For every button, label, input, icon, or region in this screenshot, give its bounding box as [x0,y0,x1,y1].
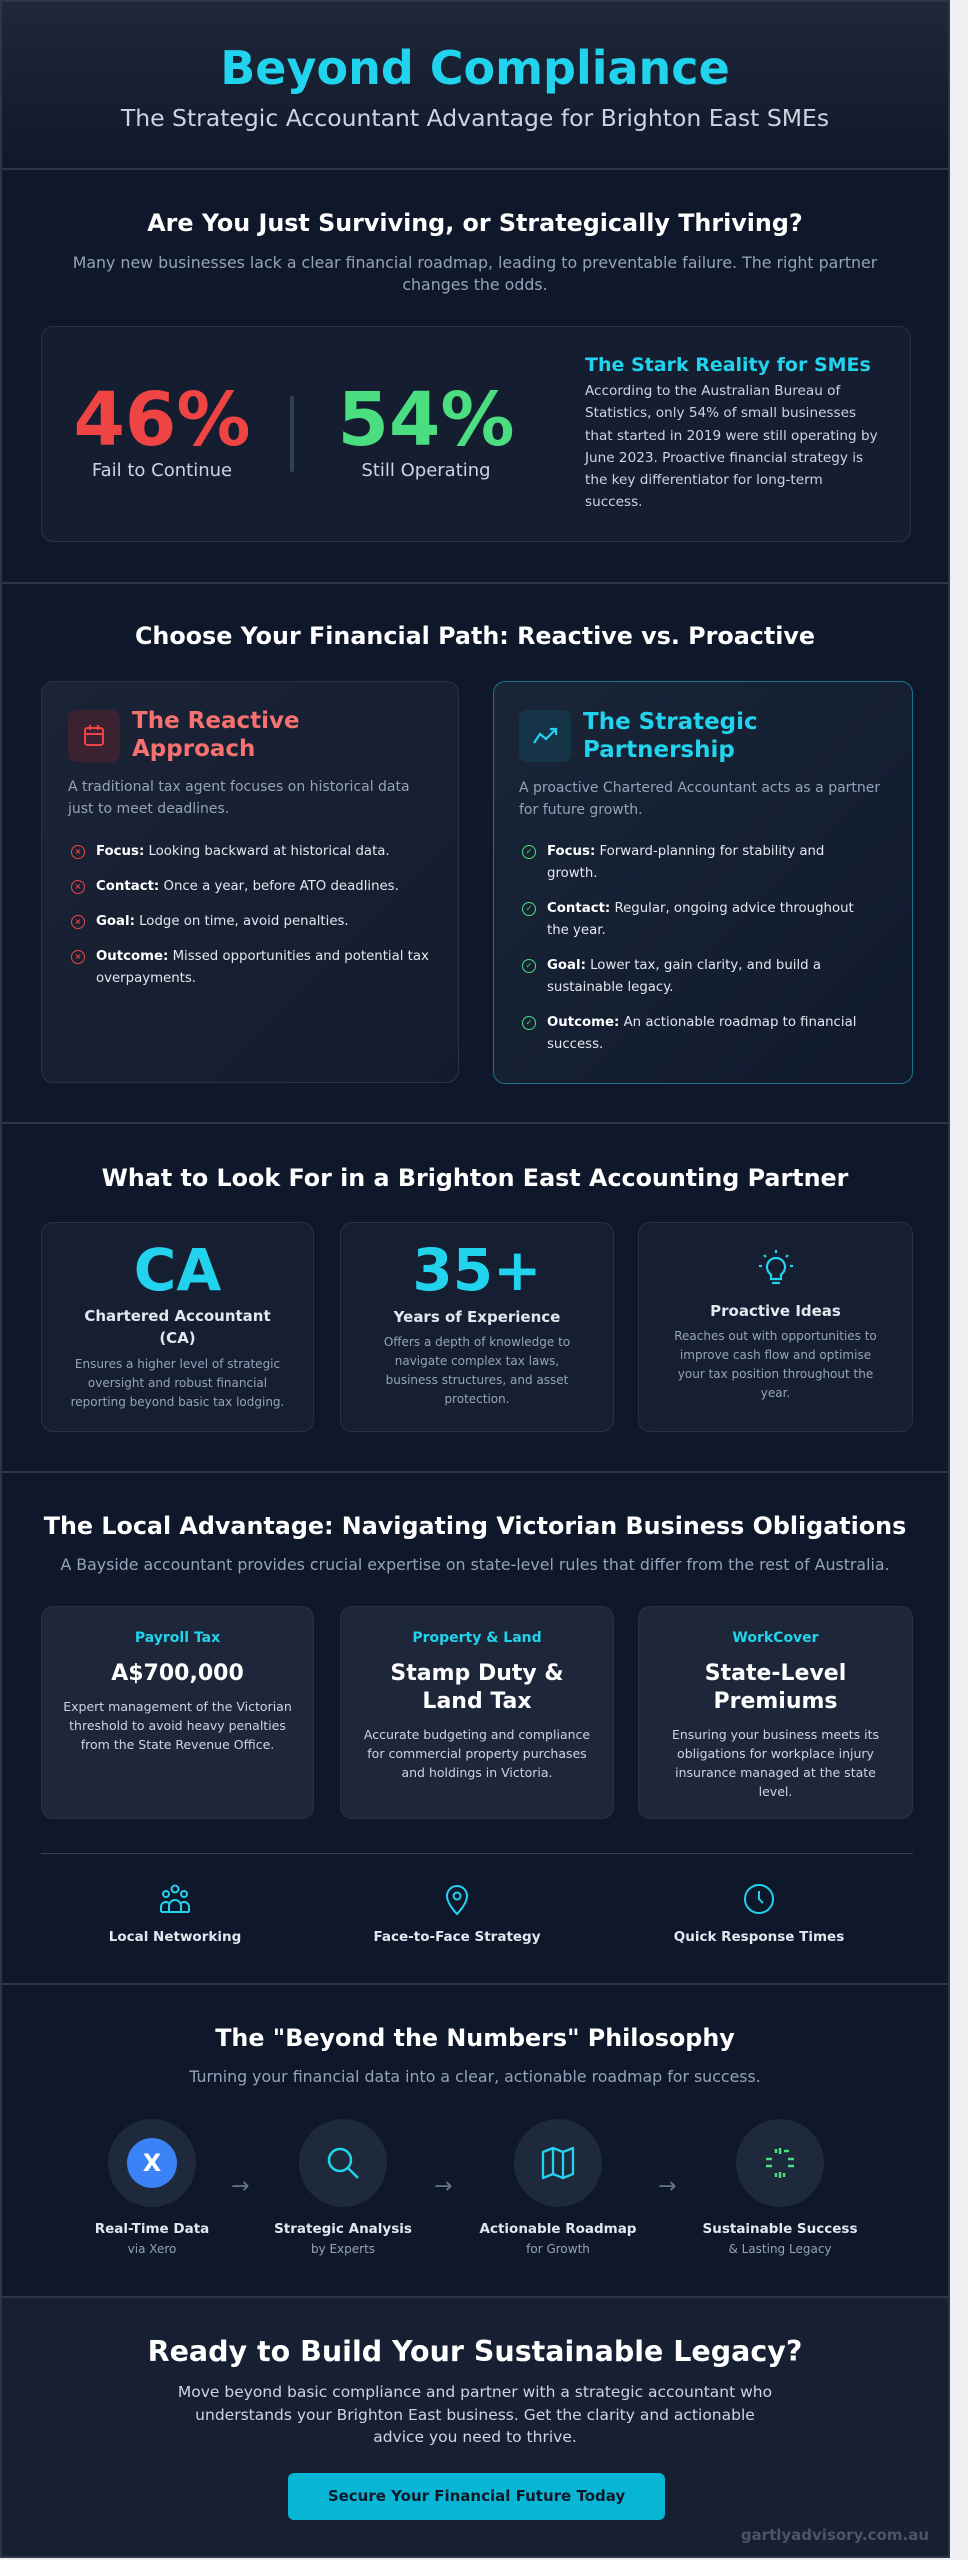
feature: networking: Local Networking [109,1929,241,1945]
text: Move beyond basic compliance and partner with a strategic accountant who understands your Brighton East business. Get the clarity and actionable advice you need to thrive. [178,2383,772,2446]
card: workcover [638,1606,913,1819]
list: Focus: Forward-planning for stability and growth. [547,844,824,881]
card: 35+ years [340,1222,614,1432]
stark reality text: The Stark Reality for SMEs [585,354,871,376]
title: The Strategic [583,709,758,735]
button [288,2473,665,2520]
list: Goal: Lower tax, gain clarity, and build a sustainable legacy. [547,958,821,995]
process flow [95,2119,858,2256]
list: ✓ [526,961,532,970]
stat: 46%: 46% [73,377,251,463]
list: ✓ [526,1018,532,1027]
description: A proactive Chartered Accountant acts as a partner for future growth. [519,780,880,818]
card: workcover: State-Level [705,1661,846,1686]
heading: The Local Advantage: Navigating Victorian Business Obligations [44,1512,906,1540]
feature: response times: Quick Response Times [674,1929,844,1945]
card: payroll tax: Expert management of the Victorian threshold to avoid heavy penalties from the State Revenue Office. [63,1699,292,1752]
feature: face-to-face: Face-to-Face Strategy [373,1929,541,1945]
stat card [41,326,911,542]
footer url: gartlyadvisory.com.au [741,2526,929,2544]
card: CA: (CA) [159,1329,196,1347]
panel: reactive [41,681,459,1083]
subtitle: The Strategic Accountant Advantage for Brighton East SMEs [121,104,829,132]
list [71,844,429,986]
stat: 46%: Fail to Continue [92,460,232,481]
card: proactive ideas [638,1222,913,1432]
heading: Are You Just Surviving, or Strategically Thriving? [147,209,803,237]
card: CA: CA [134,1236,221,1304]
subheading: A Bayside accountant provides crucial expertise on state-level rules that differ from the rest of Australia. [60,1555,890,1574]
icon: calendar [68,710,120,762]
step: real-time data: via Xero [128,2242,176,2256]
list: Outcome: An actionable roadmap to financial success. [547,1015,856,1052]
list: × [75,847,81,856]
feature: response times [674,1884,844,1945]
list: × [75,882,81,891]
card: CA: Ensures a higher level of strategic oversight and robust financial reporting beyond basic tax lodging. [71,1357,284,1409]
button: Secure Your Financial Future Today [328,2487,625,2505]
list: ✓ [526,904,532,913]
step: real-time data: X [143,2149,161,2177]
card: workcover: WorkCover [732,1630,819,1646]
card: proactive ideas: Reaches out with opportunities to improve cash flow and optimise your tax position throughout the year. [674,1329,877,1400]
subheading: Turning your financial data into a clear, actionable roadmap for success. [189,2067,761,2086]
title [132,708,300,762]
section: what to look for [41,1164,913,1432]
title: Beyond Compliance [220,41,730,95]
card: workcover: Premiums [713,1689,838,1714]
section: financial path [41,622,913,1084]
section: local advantage [41,1512,913,1945]
list: Focus: Looking backward at historical data. [96,844,390,859]
list: × [75,952,81,961]
step: success: & Lasting Legacy [728,2242,832,2256]
card: CA: Chartered Accountant [84,1307,271,1325]
step: success: Sustainable Success [702,2221,858,2237]
section: call to action [2,2298,948,2556]
arrow: → [231,2174,249,2199]
list: ✓ [526,847,532,856]
list: Goal: Lodge on time, avoid penalties. [96,914,349,929]
heading: Ready to Build Your Sustainable Legacy? [148,2335,802,2368]
card: property: Land Tax [422,1689,532,1714]
card: proactive ideas: Proactive Ideas [710,1302,841,1320]
title [583,709,758,763]
step: real-time data [95,2119,209,2256]
feature: face-to-face [373,1885,541,1945]
card: payroll tax: A$700,000 [111,1661,244,1686]
stark reality text: According to the Australian Bureau of Statistics, only 54% of small businesses that started in 2019 were still operating by June 2023. Proactive financial strategy is the key differentiator for long-term success. [585,383,878,510]
card: property: Property & Land [412,1630,542,1646]
section: surviving or thriving [41,209,911,542]
step: real-time data: Real-Time Data [95,2221,209,2237]
card: payroll tax [41,1606,314,1819]
step: roadmap: for Growth [526,2242,590,2256]
local features [109,1884,844,1945]
card: property: Accurate budgeting and compliance for commercial property purchases and holdings in Victoria. [364,1727,590,1780]
title: Partnership [583,737,735,763]
arrow: → [434,2174,452,2199]
card: 35+ years: Offers a depth of knowledge to navigate complex tax laws, business structures, and asset protection. [384,1335,570,1406]
stat: 54%: 54% [337,377,515,463]
card: property [340,1606,614,1819]
step: analysis [274,2119,412,2256]
step: analysis: Strategic Analysis [274,2221,412,2237]
description: A traditional tax agent focuses on historical data just to meet deadlines. [68,779,410,817]
card: 35+ years: Years of Experience [394,1308,560,1326]
step: roadmap: Actionable Roadmap [480,2221,636,2237]
header [2,2,948,168]
heading: Choose Your Financial Path: Reactive vs. Proactive [135,622,815,650]
list [522,844,856,1052]
arrow: → [658,2174,676,2199]
list: Outcome: Missed opportunities and potential tax overpayments. [96,949,429,986]
list: Contact: Regular, ongoing advice throughout the year. [547,901,854,938]
card: CA [41,1222,314,1432]
feature: networking [109,1884,241,1945]
title: Approach [132,736,255,762]
panel: strategic [493,681,913,1084]
step: roadmap [480,2119,636,2256]
card: payroll tax: Payroll Tax [135,1630,220,1646]
stat: 54%: Still Operating [361,460,491,481]
card: 35+ years: 35+ [412,1236,542,1304]
icon: bulb [759,1250,793,1284]
heading: What to Look For in a Brighton East Accounting Partner [102,1164,848,1192]
section: philosophy [95,2024,858,2256]
step: success [702,2119,858,2256]
card: property: Stamp Duty & [390,1661,564,1686]
step: analysis: by Experts [311,2242,375,2256]
list: Contact: Once a year, before ATO deadlines. [96,879,399,894]
heading: The "Beyond the Numbers" Philosophy [215,2024,735,2052]
title: The Reactive [132,708,300,734]
intro text: Many new businesses lack a clear financial roadmap, leading to preventable failure. The right partner changes the odds. [73,253,877,294]
icon: trend [519,710,571,762]
list: × [75,917,81,926]
card: workcover: Ensuring your business meets its obligations for workplace injury insurance managed at the state level. [672,1727,879,1799]
